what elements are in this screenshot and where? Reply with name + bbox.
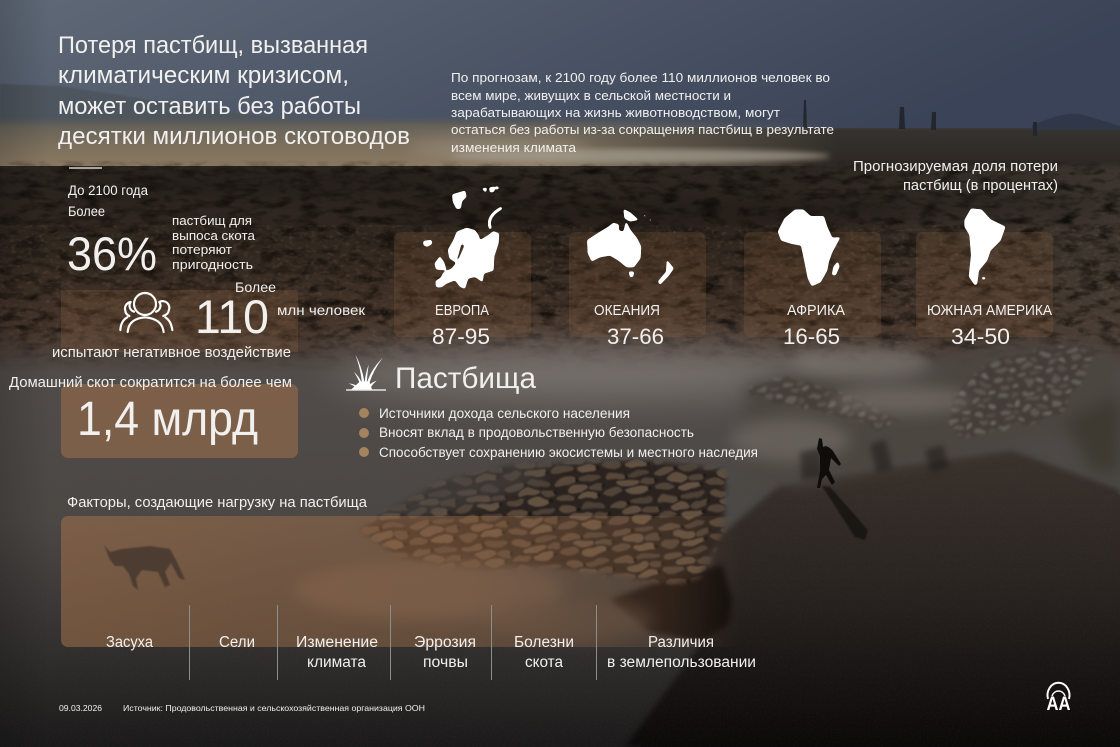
chart heading: projected pasture loss: пастбищ (в процентах)	[903, 177, 1058, 194]
panel: Europe backdrop	[394, 232, 531, 337]
region: Europe: ЕВРОПА	[435, 302, 489, 319]
panel: 110 million backdrop	[61, 290, 298, 352]
chart heading: projected pasture loss: Прогнозируемая доля потери	[853, 158, 1058, 175]
region: Africa: АФРИКА	[787, 302, 845, 319]
stat: 36 percent of pastures: 36%	[67, 227, 157, 280]
stat: 36 percent of pastures	[67, 183, 256, 280]
intro paragraph: всем мире, живущих в сельской местности и	[451, 88, 731, 103]
region: South America	[927, 208, 1052, 349]
region: Oceania: ОКЕАНИЯ	[594, 302, 660, 319]
herder silhouette	[817, 438, 868, 540]
icon: group of people	[120, 293, 172, 332]
heading: pressure factors: Факторы, создающие нагрузку на пастбища	[67, 494, 368, 511]
title	[58, 32, 410, 150]
factor labels: климата	[307, 654, 366, 671]
footer: date and source: 09.03.2026	[59, 703, 102, 713]
icon: Europe map	[423, 185, 502, 289]
factor labels: Эррозия	[414, 634, 476, 651]
stat: 110 million people: испытают негативное воздействие	[52, 345, 291, 361]
region: Europe	[423, 185, 502, 349]
icon: Africa map	[778, 209, 841, 286]
footer: date and source: Источник: Продовольственная и сельскохозяйственная организация ООН	[123, 703, 425, 713]
icon: Oceania map	[587, 209, 676, 285]
factor labels: почвы	[423, 654, 468, 671]
stat: 110 million people: 110	[195, 290, 269, 343]
stat: livestock decline: 1,4 млрд	[77, 393, 258, 446]
intro paragraph	[451, 70, 834, 155]
title: Потеря пастбищ, вызванная	[58, 32, 368, 59]
factor labels	[106, 634, 756, 671]
region: Oceania: 37-66	[607, 324, 664, 349]
list: pasture benefits	[359, 406, 758, 460]
factor labels: Различия	[648, 634, 714, 651]
stat: 36 percent of pastures: выпоса скота	[172, 228, 256, 243]
factor labels: Болезни	[514, 634, 574, 651]
list: pasture benefits: Вносят вклад в продовольственную безопасность	[379, 425, 694, 440]
icon: AA logo	[1046, 683, 1071, 715]
list: pasture benefits: Способствует сохранению экосистемы и местного наследия	[379, 445, 758, 460]
title: десятки миллионов скотоводов	[58, 123, 410, 150]
icon: South America map	[964, 208, 1006, 286]
title: может оставить без работы	[58, 93, 361, 120]
region: Africa: 16-65	[783, 324, 840, 349]
stat: livestock decline: Домашний скот сократится на более чем	[9, 375, 292, 391]
stat: 110 million people: Более	[235, 279, 276, 295]
animal silhouette in dust	[104, 545, 185, 590]
intro paragraph: зарабатывающих на жизнь животноводством, могут	[451, 105, 780, 120]
stat: 36 percent of pastures: потеряют	[172, 242, 232, 257]
list: pasture benefits: Источники дохода сельского населения	[379, 406, 630, 421]
panel: factors photo backdrop	[61, 516, 741, 647]
chart heading: projected pasture loss	[853, 158, 1058, 194]
factor labels: Засуха	[106, 634, 153, 651]
region: South America: 34-50	[951, 324, 1010, 349]
factor labels: Сели	[219, 634, 255, 651]
factor labels: Изменение	[296, 634, 378, 651]
region: South America: ЮЖНАЯ АМЕРИКА	[927, 302, 1052, 319]
stat: 36 percent of pastures: До 2100 года	[68, 183, 148, 198]
icon: grass tuft	[346, 355, 386, 391]
heading: pastures: Пастбища	[395, 362, 536, 395]
stat: 110 million people: млн человек	[277, 302, 366, 318]
icon: AA logo: AA	[1046, 694, 1071, 715]
intro paragraph: изменения климата	[451, 140, 577, 155]
intro paragraph: По прогнозам, к 2100 году более 110 миллионов человек во	[451, 70, 830, 85]
stat: 36 percent of pastures: Более	[68, 204, 105, 219]
intro paragraph: остаться без работы из-за сокращения пастбищ в результате	[451, 122, 834, 137]
panel: 1.4 billion backdrop	[61, 384, 298, 458]
title: климатическим кризисом,	[58, 62, 349, 89]
region: Oceania	[587, 209, 676, 349]
stat: 110 million people	[52, 279, 366, 361]
region: Africa	[778, 209, 845, 349]
factor labels: скота	[525, 654, 563, 671]
factor labels: в землепользовании	[607, 654, 756, 671]
stat: livestock decline	[9, 375, 292, 446]
stat: 36 percent of pastures: пригодность	[172, 257, 253, 272]
panel: Africa backdrop	[744, 232, 881, 337]
panel: South America backdrop	[916, 232, 1053, 337]
region: Europe: 87-95	[432, 324, 490, 349]
panel: Oceania backdrop	[569, 232, 706, 337]
stat: 36 percent of pastures: пастбищ для	[172, 213, 252, 228]
